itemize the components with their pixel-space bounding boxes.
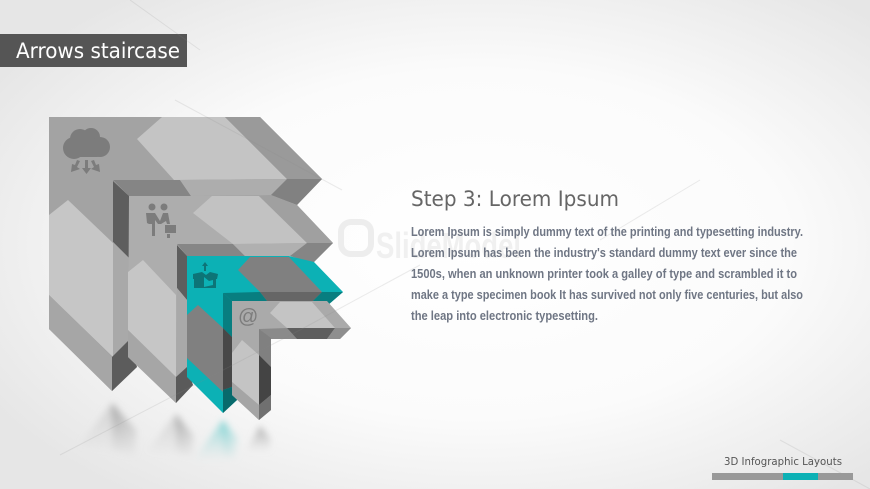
icon: cloud with arrows [63, 128, 110, 174]
staircase arrows [49, 117, 351, 420]
body text: Lorem Ipsum has been the industry's standard dummy text ever since the [411, 245, 797, 260]
arrow 1: outer grey [49, 117, 322, 391]
icon: handshake [146, 204, 176, 238]
title banner: Arrows staircase [16, 39, 180, 63]
body text [411, 224, 803, 323]
arrow 2: grey [128, 195, 333, 403]
progress bar [712, 473, 853, 480]
body text: the leap into electronic typesetting. [411, 308, 598, 323]
arrow 3: teal highlighted [187, 256, 343, 413]
watermark [341, 222, 521, 266]
body text: Lorem Ipsum is simply dummy text of the printing and typesetting industry. [411, 224, 803, 239]
arrow 4: grey [232, 301, 351, 420]
watermark: SlideModel [376, 225, 521, 266]
title banner [0, 34, 187, 67]
footer label: 3D Infographic Layouts [724, 455, 842, 468]
body text: 1500s, when an unknown printer took a galley of type and scrambled it to [411, 266, 797, 281]
icon: box [193, 262, 218, 288]
icon: at sign: @ [238, 306, 258, 328]
reflections [80, 403, 270, 462]
heading: Step 3: Lorem Ipsum [411, 187, 619, 211]
body text: make a type specimen book It has survived not only five centuries, but also [411, 287, 803, 302]
